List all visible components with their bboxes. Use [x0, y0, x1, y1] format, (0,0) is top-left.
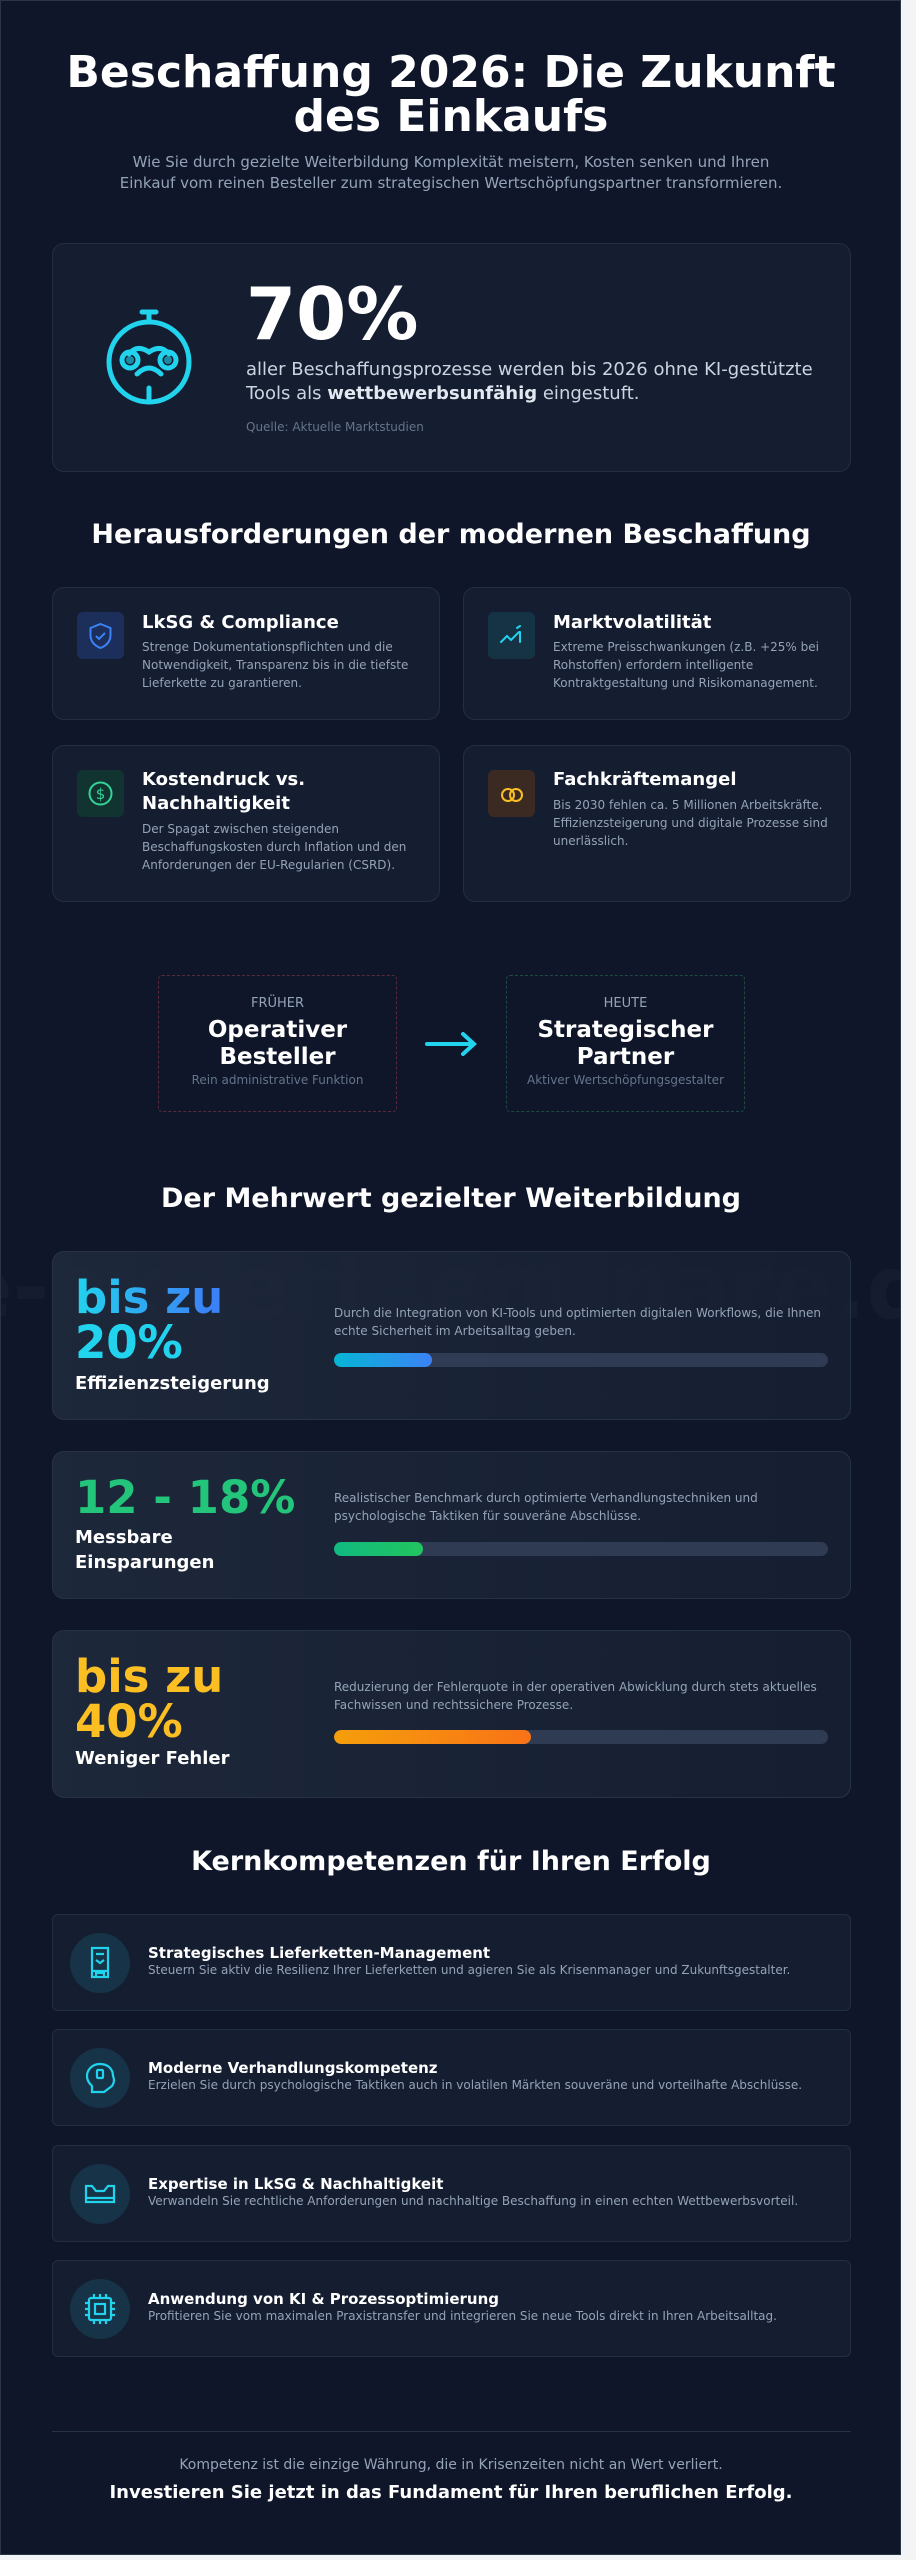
text: Einsparungen — [75, 1552, 214, 1573]
stat text: aller Beschaffungsprozesse werden bis 2026 ohne KI-gestützte Tools als wettbewerbsunfähig eingestuft. — [246, 359, 813, 404]
text: bis zu — [75, 1650, 223, 1703]
panel: key stat — [52, 243, 851, 472]
panel: Fachkräftemangel: Bis 2030 fehlen ca. 5 Millionen Arbeitskräfte. Effizienzsteigerung und digitale Prozesse sind unerlässlich. — [553, 798, 828, 848]
panel: Marktvolatilität: Extreme Preisschwankungen (z.B. +25% bei Rohstoffen) erfordern intelligente Kontraktgestaltung und Risikomanagement. — [553, 640, 819, 690]
panel: LkSG: Strenge Dokumentationspflichten und die Notwendigkeit, Transparenz bis in die tiefste Lieferkette zu garantieren. — [142, 640, 408, 690]
icon: head — [70, 2048, 130, 2108]
panel: Kostendruck: Nachhaltigkeit — [142, 793, 290, 814]
text: 40% — [75, 1695, 183, 1748]
icon: tray — [70, 2164, 130, 2224]
panel: LkSG: LkSG & Compliance — [142, 612, 339, 633]
panel: LkSG Expertise: Expertise in LkSG & Nachhaltigkeit — [148, 2175, 443, 2193]
panel: Lieferketten: Strategisches Lieferketten-Management — [148, 1944, 490, 1962]
text: Durch die Integration von KI-Tools und optimierten digitalen Workflows, die Ihnen echte Sicherheit im Arbeitsalltag geben. — [334, 1306, 821, 1338]
panel: KI: Profitieren Sie vom maximalen Praxistransfer und integrieren Sie neue Tools direkt in Ihren Arbeitsalltag. — [148, 2309, 777, 2323]
panel: Lieferketten: Steuern Sie aktiv die Resilienz Ihrer Lieferketten und agieren Sie als Krisenmanager und Zukunftsgestalter. — [148, 1963, 790, 1977]
source: Quelle: Aktuelle Marktstudien — [246, 420, 424, 434]
panel: KI: Anwendung von KI & Prozessoptimierung — [148, 2290, 499, 2308]
bar: 18% — [334, 1542, 828, 1556]
panel: Marktvolatilität: Marktvolatilität — [553, 612, 711, 633]
icon: shield — [77, 612, 124, 659]
footer text: Kompetenz ist die einzige Währung, die in Krisenzeiten nicht an Wert verliert. — [179, 2457, 723, 2473]
bar: 20% — [334, 1353, 828, 1367]
panel: Effizienz — [52, 1251, 851, 1420]
panel: Fachkräftemangel — [463, 745, 851, 902]
panel: Kostendruck: Kostendruck vs. — [142, 769, 305, 790]
text: Realistischer Benchmark durch optimierte Verhandlungstechniken und psychologische Taktiken für souveräne Abschlüsse. — [334, 1491, 758, 1523]
panel: früher: Rein administrative Funktion — [192, 1073, 363, 1087]
subtitle — [120, 153, 782, 192]
panel: Einsparungen — [52, 1451, 851, 1599]
panel: LkSG Expertise — [52, 2145, 851, 2242]
subtitle: Einkauf vom reinen Besteller zum strategischen Wertschöpfungspartner transformieren. — [120, 174, 782, 192]
panel: heute — [506, 975, 745, 1112]
panel: Verhandlung: Erzielen Sie durch psychologische Taktiken auch in volatilen Märkten souveräne und vorteilhafte Abschlüsse. — [148, 2078, 802, 2092]
panel: früher: Operativer — [208, 1017, 347, 1043]
panel: heute: HEUTE — [604, 996, 647, 1011]
panel: Kostendruck — [52, 745, 440, 902]
subtitle: Wie Sie durch gezielte Weiterbildung Komplexität meistern, Kosten senken und Ihren — [133, 153, 769, 171]
bar: 40% — [334, 1730, 828, 1744]
heading: challenges: Herausforderungen der modernen Beschaffung — [91, 519, 811, 550]
stat number: 70% — [246, 272, 418, 356]
icon: dollar — [77, 770, 124, 817]
panel: KI — [52, 2260, 851, 2357]
text: Weniger Fehler — [75, 1748, 230, 1769]
title: Beschaffung 2026: Die Zukunft — [66, 47, 836, 98]
text: 12 - 18% — [75, 1471, 295, 1524]
panel: Fachkräftemangel: Fachkräftemangel — [553, 769, 736, 790]
icon: chip — [70, 2279, 130, 2339]
panel: heute: Partner — [577, 1044, 674, 1070]
icon: robot stopwatch — [106, 310, 192, 404]
panel: heute: Strategischer — [537, 1017, 714, 1043]
panel: Marktvolatilität — [463, 587, 851, 720]
panel: Lieferketten — [52, 1914, 851, 2011]
title — [66, 47, 836, 142]
icon: dollar: $ — [96, 785, 105, 803]
text: bis zu — [75, 1271, 223, 1324]
icon: people — [488, 770, 535, 817]
panel: LkSG Expertise: Verwandeln Sie rechtliche Anforderungen und nachhaltige Beschaffung in einen echten Wettbewerbsvorteil. — [148, 2194, 798, 2208]
panel: früher: FRÜHER — [251, 996, 304, 1011]
arrow — [425, 1032, 477, 1056]
text: 20% — [75, 1316, 183, 1369]
text: Effizienzsteigerung — [75, 1373, 270, 1394]
heading: Kernkompetenzen: Kernkompetenzen für Ihren Erfolg — [191, 1846, 711, 1877]
panel: früher: Besteller — [219, 1044, 336, 1070]
title: des Einkaufs — [294, 91, 608, 142]
panel: Fehler — [52, 1630, 851, 1798]
panel: Verhandlung — [52, 2029, 851, 2126]
text: Messbare — [75, 1527, 173, 1548]
panel: LkSG — [52, 587, 440, 720]
panel: früher — [158, 975, 397, 1112]
panel: Kostendruck: Der Spagat zwischen steigenden Beschaffungskosten durch Inflation und den Anforderungen der EU-Regularien (CSRD). — [142, 822, 406, 872]
icon: building — [70, 1933, 130, 1993]
icon: chart — [488, 612, 535, 659]
text: Reduzierung der Fehlerquote in der operativen Abwicklung durch stets aktuelles Fachwissen und rechtssichere Prozesse. — [334, 1680, 817, 1712]
footer cta: Investieren Sie jetzt in das Fundament für Ihren beruflichen Erfolg. — [109, 2482, 793, 2503]
panel: heute: Aktiver Wertschöpfungsgestalter — [527, 1073, 724, 1087]
heading: Mehrwert: Der Mehrwert gezielter Weiterbildung — [161, 1183, 741, 1214]
panel: Verhandlung: Moderne Verhandlungskompetenz — [148, 2059, 438, 2077]
